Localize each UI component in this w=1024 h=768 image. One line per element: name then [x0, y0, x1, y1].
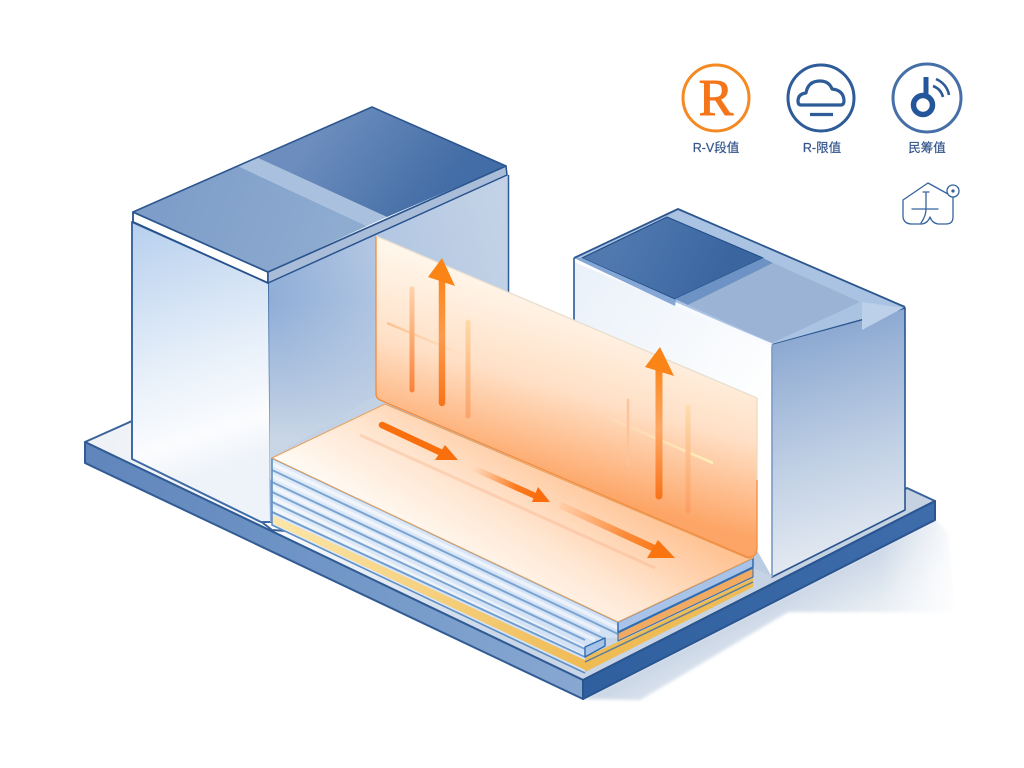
right block — [574, 209, 905, 577]
stack: right face orange layer — [618, 568, 753, 641]
stack: right face lower base — [585, 578, 753, 672]
label: R-V value: R-V段值 — [693, 140, 739, 155]
right wall markings — [607, 400, 713, 511]
left block: top panel — [133, 166, 367, 272]
right block: side face — [772, 308, 905, 577]
drop shadow — [583, 520, 970, 700]
base platform — [85, 421, 935, 699]
left block: right edge — [508, 175, 510, 300]
wall right upper edge — [756, 398, 758, 480]
stack: top surface — [272, 404, 753, 622]
icon: cloud — [788, 65, 854, 131]
up arrow left — [428, 258, 455, 403]
up arrow right — [645, 347, 674, 496]
icon: small house — [903, 183, 959, 224]
left wall markings — [387, 289, 480, 416]
right block: top outline — [574, 209, 905, 307]
floor arrows — [360, 425, 675, 568]
faint floor line — [360, 435, 655, 568]
right block: top base — [574, 209, 905, 344]
floor arrow 1 — [382, 425, 458, 460]
left block: side top edge — [268, 166, 507, 283]
wall surface — [376, 236, 757, 557]
right block: front face — [574, 262, 772, 577]
left block: top band — [238, 158, 387, 226]
right block: top dark panel — [582, 217, 763, 299]
label: third value: 民筹值 — [908, 140, 946, 155]
label: R limit value: R-限值 — [803, 140, 841, 155]
shadow wedge beside stack — [753, 552, 772, 577]
wall bottom and side outline — [376, 236, 757, 557]
icon: R value: R — [699, 70, 734, 127]
stack: left border — [272, 458, 585, 673]
orange wall panel — [376, 236, 757, 557]
left block: white front edge — [133, 212, 268, 283]
left block: top outline — [133, 107, 506, 272]
right block: notch — [862, 302, 903, 330]
right block: groove — [675, 258, 773, 305]
icon: R value — [683, 65, 749, 131]
stack: right face blue layer — [618, 558, 753, 632]
stack: right face lower line — [585, 582, 753, 662]
floor arrow 3 — [560, 505, 675, 558]
stack: white and blue stripes — [272, 458, 618, 657]
left block — [132, 107, 509, 522]
stack: front-left face — [272, 458, 618, 672]
stack: gold layer left — [272, 515, 585, 670]
stack: small step — [585, 638, 605, 657]
icon: signal ring — [893, 64, 961, 132]
right block: white ledge — [676, 305, 772, 345]
right block: front edge — [771, 344, 773, 577]
left block: side face lower fade — [269, 250, 376, 480]
left block: top dark panel — [258, 107, 506, 217]
wall top edge — [376, 236, 757, 398]
icon row — [683, 64, 961, 224]
left block: side face — [269, 175, 509, 522]
floor arrow 2 — [473, 468, 550, 502]
back shadow behind stack — [272, 396, 392, 470]
layered floor stack — [272, 396, 753, 673]
right block: left edge — [573, 258, 575, 340]
left block: front face — [132, 222, 271, 522]
right block: top light panel — [688, 263, 860, 343]
right block: front top strip — [574, 258, 676, 306]
